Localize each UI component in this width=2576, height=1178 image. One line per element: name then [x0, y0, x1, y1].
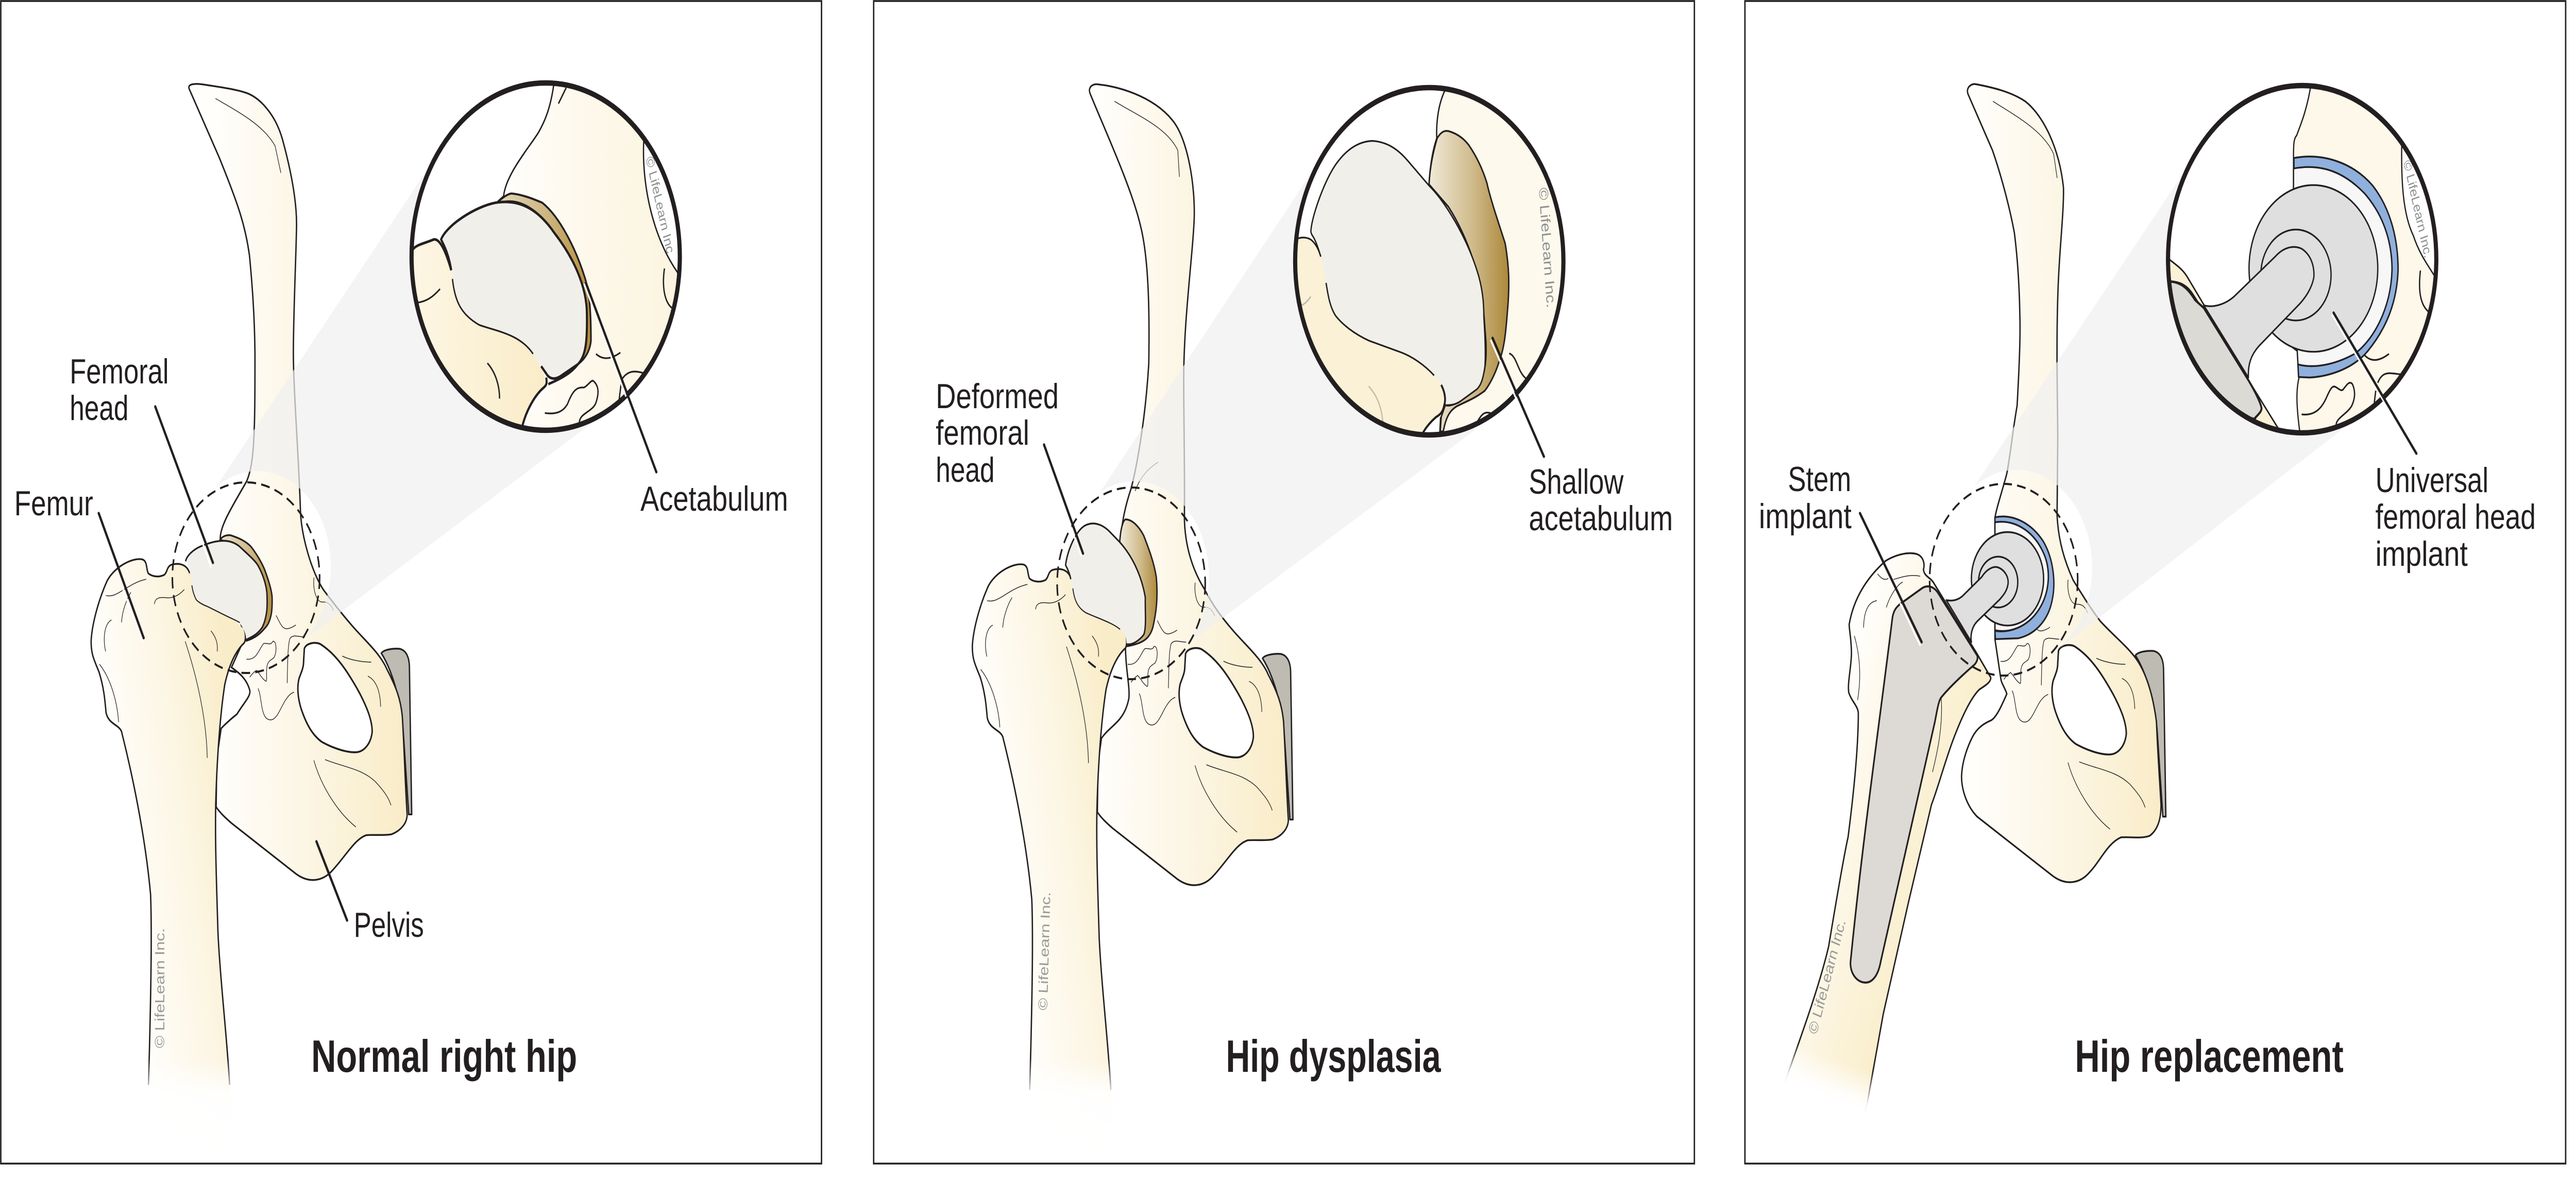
inset pelvis opening: [644, 143, 678, 271]
inset femoral head: [1311, 141, 1485, 405]
obturator foramen: [298, 643, 372, 752]
pelvis: [1961, 84, 2161, 882]
label: Stem implant: implant: [1759, 496, 1852, 536]
femur bottom fade: [1758, 1030, 1890, 1163]
inset collar: [2261, 229, 2331, 321]
inset pelvis: [1428, 78, 1578, 433]
leader: acetabulum: [584, 283, 656, 472]
blue acetabular cup: [1995, 516, 2054, 639]
hip bones: pelvis and femur: [972, 85, 1293, 1157]
leader: universal femoral head implant: [2332, 313, 2416, 453]
inset femur strip: [2165, 257, 2279, 430]
label: Universal femoral head implant: Universal: [2376, 460, 2488, 500]
femur copyright: © LifeLearn Inc.: [153, 928, 167, 1048]
inset femoral head: [441, 202, 587, 379]
inset femur edges: [413, 240, 578, 426]
dashed zoom circle: [173, 482, 319, 673]
inset opening edge: [643, 141, 678, 273]
inset cup: [2294, 157, 2398, 378]
ilium detail line: [216, 98, 281, 173]
title: Hip replacement: Hip replacement: [2075, 1031, 2344, 1082]
deformed femoral head: [1065, 524, 1145, 644]
hip bones and implant: [1758, 84, 2166, 1163]
panel frame: [1, 1, 822, 1164]
inset femur: [1290, 238, 1445, 433]
head collar: [1978, 557, 2018, 608]
inset ring: [1295, 88, 1564, 435]
label: Deformed femoral head: Deformed: [936, 376, 1059, 416]
title: Hip dysplasia: Hip dysplasia: [1226, 1031, 1442, 1082]
inset contents: [1290, 78, 1578, 433]
pelvis: [189, 84, 407, 880]
pelvis detail lines: [2001, 580, 2145, 829]
inset femur edges: [1297, 238, 1445, 433]
magnification wedge: [215, 175, 593, 640]
magnification wedge: [1974, 175, 2344, 648]
hip bones: pelvis and femur: [91, 84, 412, 1152]
inset pelvis: [525, 86, 677, 428]
pelvis detail lines: [247, 578, 391, 827]
inset pelvis edges: [497, 85, 554, 203]
label: Pelvis: Pelvis: [354, 905, 424, 945]
femoral head: [186, 541, 267, 640]
inset copyright: © LifeLearn Inc.: [2401, 158, 2434, 260]
inset pelvis opening: [2402, 130, 2450, 276]
inset femur: [406, 239, 547, 426]
label: Shallow acetabulum: Shallow: [1529, 462, 1624, 501]
stem implant: [1851, 586, 1977, 983]
shallow acetabulum: [1120, 519, 1157, 647]
label: Universal femoral head implant: implant: [2376, 534, 2468, 574]
inset detail lines: [2301, 271, 2429, 425]
inset neck: [2204, 247, 2314, 378]
title: Normal right hip: Normal right hip: [311, 1031, 577, 1082]
femur copyright: © LifeLearn Inc.: [1036, 891, 1054, 1011]
femur: [91, 559, 245, 1152]
obturator foramen: [2052, 645, 2126, 754]
inset stem: [2165, 281, 2262, 419]
inset contents: [414, 86, 677, 428]
inset pelvis edge: [1436, 90, 1445, 138]
label: Deformed femoral head: head: [936, 450, 995, 490]
leader: femoral head: [155, 407, 213, 567]
inset head outline: [441, 202, 587, 379]
ilium detail line: [1993, 102, 2057, 178]
leader: pelvis: [316, 842, 347, 920]
acetabulum: [220, 535, 272, 641]
inset ring: [2168, 86, 2436, 433]
femur bottom fade: [1012, 1059, 1136, 1159]
sacrum: [1263, 654, 1293, 819]
inset pelvis lines: [1302, 138, 1527, 433]
label: Femur: Femur: [14, 483, 93, 523]
magnified inset: implant joint: [2165, 83, 2454, 438]
femur: [972, 564, 1127, 1157]
inset ring: [412, 83, 680, 430]
pelvis: [1090, 85, 1289, 885]
femur: [1776, 553, 1991, 1133]
inset detail lines: [418, 88, 672, 422]
label: Deformed femoral head: femoral: [936, 413, 1029, 452]
magnified inset: dysplastic joint: [1290, 78, 1578, 437]
panel: hip replacement: [1745, 1, 2566, 1164]
inset pelvis: [2273, 83, 2454, 438]
label: Femoral head: head: [70, 388, 129, 428]
cup liner: [1995, 522, 2048, 631]
leader: deformed femoral head: [1044, 445, 1083, 556]
inset shallow acetabulum: [1429, 131, 1509, 431]
femur bottom fade: [131, 1059, 255, 1159]
obturator foramen: [1179, 648, 1253, 758]
leader: stem implant: [1860, 513, 1922, 645]
label: Acetabulum: Acetabulum: [640, 479, 788, 518]
inset liner: [2294, 167, 2392, 366]
label: Universal femoral head implant: femoral head: [2376, 497, 2536, 536]
sacrum: [381, 649, 412, 814]
inset ball head: [2249, 185, 2378, 352]
inset copyright: © LifeLearn Inc.: [1536, 187, 1558, 309]
pelvis detail lines: [1128, 583, 1272, 832]
panel: hip dysplasia: [874, 1, 1694, 1164]
panel: normal right hip: [1, 1, 822, 1164]
dashed zoom circle: [1057, 487, 1205, 679]
leader: shallow acetabulum: [1491, 338, 1544, 457]
leader: femur: [99, 513, 144, 642]
inset head outline: [1311, 141, 1485, 405]
magnified inset: normal joint: [406, 78, 692, 441]
label: Femoral head: Femoral: [70, 351, 169, 391]
sacrum: [2136, 651, 2166, 817]
inset acetabulum: [498, 194, 591, 364]
dashed zoom circle: [1929, 484, 2078, 676]
inset contents: [2165, 83, 2454, 438]
label: Shallow acetabulum: acetabulum: [1529, 498, 1673, 538]
panel frame: [1745, 1, 2566, 1164]
label: Stem implant: Stem: [1788, 459, 1851, 499]
ilium detail lines: [1115, 102, 1179, 491]
femur copyright: © LifeLearn Inc.: [1806, 917, 1849, 1036]
ball head implant: [1971, 532, 2044, 626]
inset copyright: © LifeLearn Inc: [643, 155, 676, 255]
implant neck: [1946, 567, 2008, 642]
magnification wedge: [1100, 180, 1475, 644]
panel frame: [874, 1, 1694, 1164]
